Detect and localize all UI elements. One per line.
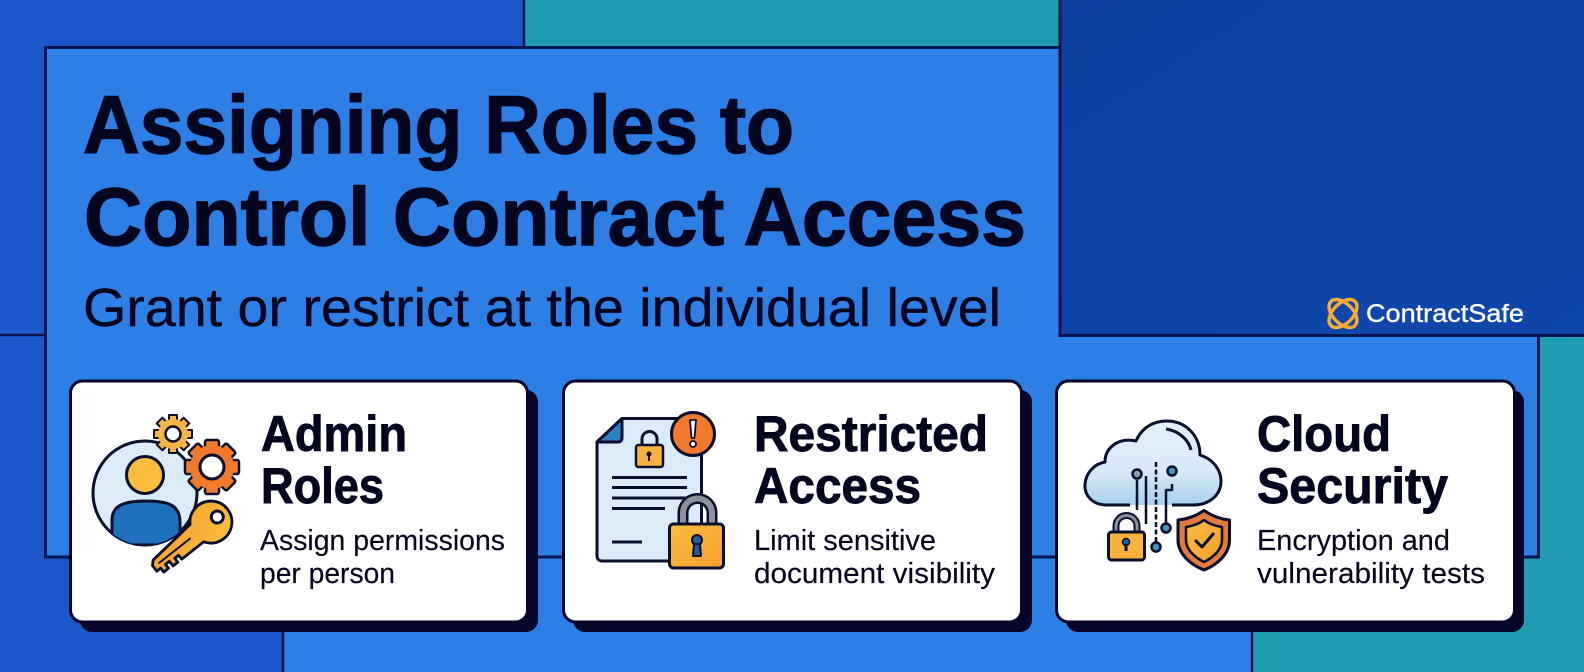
text: Admin Roles description bbox=[260, 525, 505, 590]
text: Cloud Security description: Encryption and bbox=[1257, 525, 1450, 557]
heading: Restricted Access bbox=[754, 406, 988, 514]
heading: Restricted Access: Restricted bbox=[754, 406, 988, 462]
title bbox=[83, 80, 1026, 263]
panel: main blue header bbox=[46, 48, 1538, 557]
icon: shield with check bbox=[1178, 510, 1230, 570]
heading: Cloud Security: Security bbox=[1257, 458, 1448, 514]
icon: cloud bbox=[1085, 421, 1221, 505]
icon: large gear bbox=[185, 440, 239, 494]
heading: Cloud Security: Cloud bbox=[1257, 406, 1391, 462]
icon: locked document with alert bbox=[597, 412, 724, 568]
text: Admin Roles description: per person bbox=[260, 558, 395, 590]
panel: Cloud Security card bbox=[1056, 381, 1524, 632]
icon: circuit lines bbox=[1132, 462, 1176, 552]
icon: key bbox=[141, 493, 240, 584]
logo: ContractSafe: ContractSafe bbox=[1366, 300, 1524, 328]
heading: Cloud Security bbox=[1257, 406, 1448, 514]
title: Control Contract Access bbox=[84, 172, 1026, 263]
icon: cloud, padlock and shield bbox=[1085, 421, 1230, 570]
panel: dark blue corner bbox=[1060, 0, 1584, 336]
icon: alert badge bbox=[672, 412, 714, 456]
subtitle: Grant or restrict at the individual level bbox=[83, 278, 1001, 338]
heading: Admin Roles: Admin bbox=[261, 406, 407, 462]
text: Restricted Access description: Limit sensitive bbox=[754, 525, 936, 557]
title: Assigning Roles to bbox=[83, 80, 794, 171]
icon: interlocking logo mark bbox=[1324, 294, 1362, 333]
heading: Admin Roles: Roles bbox=[261, 458, 384, 514]
icon: padlock bbox=[670, 498, 724, 568]
text: Admin Roles description: Assign permissions bbox=[260, 525, 505, 557]
text: Restricted Access description bbox=[754, 525, 995, 590]
icon: small padlock bbox=[1108, 516, 1144, 560]
icon: small gear bbox=[154, 415, 192, 453]
text: Cloud Security description bbox=[1257, 525, 1485, 590]
heading: Admin Roles bbox=[261, 406, 407, 514]
logo: ContractSafe bbox=[1324, 294, 1524, 333]
panel: Restricted Access card bbox=[564, 381, 1032, 632]
panel: Admin Roles card bbox=[70, 381, 538, 632]
heading: Restricted Access: Access bbox=[754, 458, 921, 514]
icon: user with gears and key bbox=[93, 415, 240, 584]
text: Restricted Access description: document visibility bbox=[754, 558, 995, 590]
text: Cloud Security description: vulnerability tests bbox=[1257, 558, 1485, 590]
